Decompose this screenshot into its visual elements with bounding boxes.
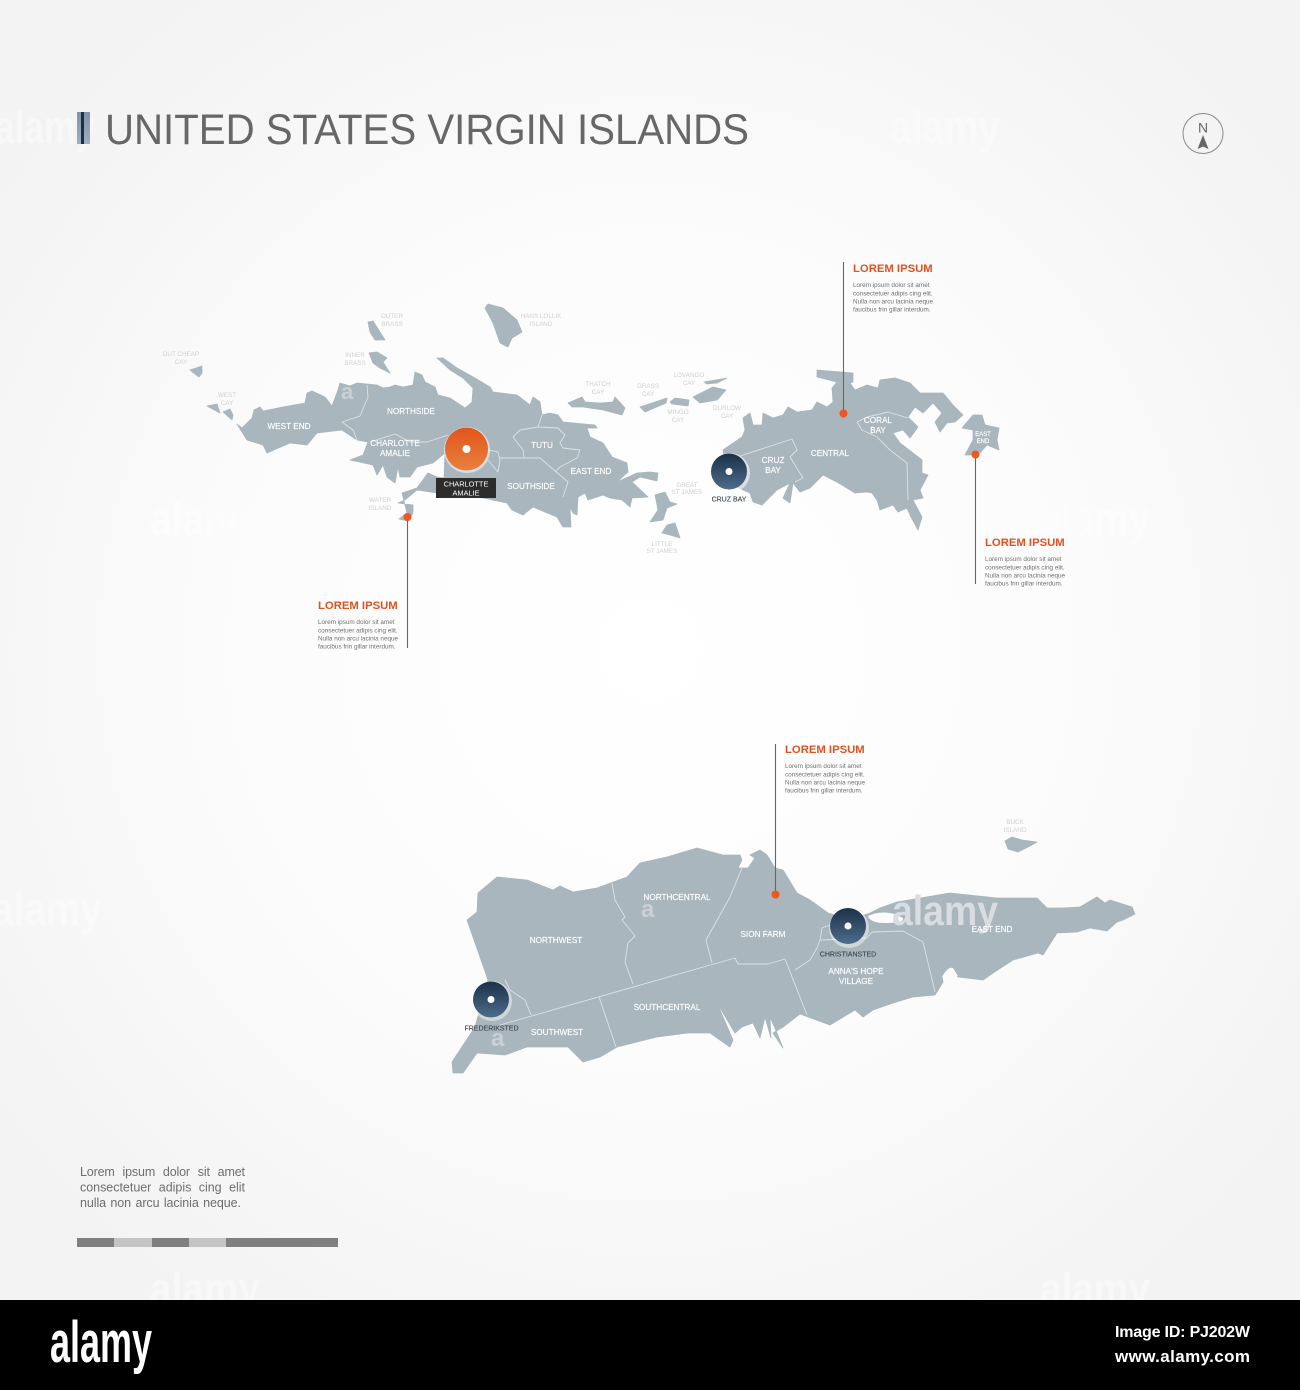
islet labels: HANS LOLLIK bbox=[521, 313, 562, 320]
islet labels: GRASS bbox=[637, 383, 659, 390]
islet labels: MINGO bbox=[667, 409, 689, 416]
pin: Christiansted: CHRISTIANSTED bbox=[820, 952, 876, 958]
callout: St John north bbox=[840, 262, 934, 418]
region labels: St John: CRUZ bbox=[762, 456, 784, 465]
islet labels: DURLOW bbox=[713, 405, 741, 412]
watermark on map bbox=[341, 379, 999, 1052]
islet: Thatch Cay bbox=[568, 397, 625, 415]
region labels: St John: BAY bbox=[765, 466, 781, 475]
text block: bottom note: consectetuer adipis cing elit bbox=[80, 1180, 246, 1194]
region labels: St Croix bbox=[530, 893, 1012, 1037]
pin: Charlotte Amalie bbox=[444, 427, 490, 473]
islet: Hans Lollik bbox=[485, 304, 522, 347]
icon: north compass bbox=[1183, 114, 1223, 154]
callout: St John north: LOREM IPSUM bbox=[853, 263, 933, 275]
callout: St John north: faucibus frin gillar interdum. bbox=[853, 306, 931, 314]
islet: Lovango Cay bbox=[693, 387, 726, 403]
pin: Frederiksted: FREDERIKSTED bbox=[464, 1026, 519, 1032]
islet labels: CAY bbox=[221, 400, 234, 407]
islet: Great St James bbox=[650, 492, 677, 522]
islet: East End bbox=[962, 415, 999, 455]
title text: UNITED STATES VIRGIN ISLANDS bbox=[105, 106, 749, 154]
islet labels: OUTER bbox=[381, 313, 403, 320]
watermarks: alamy bbox=[150, 1263, 260, 1315]
islet labels: LITTLE bbox=[652, 541, 672, 548]
region labels: St Croix: VILLAGE bbox=[839, 977, 874, 986]
callout: St Croix north: Lorem ipsum dolor sit amet bbox=[785, 763, 862, 770]
islet labels: GREAT bbox=[676, 482, 698, 489]
islet: Inner Brass bbox=[369, 352, 390, 373]
callout: St John north: Nulla non arcu lacinia neque bbox=[853, 298, 934, 306]
label: Charlotte Amalie bbox=[436, 478, 496, 498]
text block: bottom note: Lorem ipsum dolor sit amet bbox=[80, 1165, 246, 1179]
icon: north compass: N bbox=[1198, 120, 1208, 136]
callout: St John east bbox=[972, 450, 1066, 588]
region labels: St Croix: SOUTHWEST bbox=[531, 1028, 583, 1037]
region labels: St Croix: EAST END bbox=[972, 925, 1012, 934]
region labels: St Thomas bbox=[267, 407, 611, 491]
watermarks: alamy bbox=[150, 493, 260, 545]
region labels: St Thomas: TUTU bbox=[531, 441, 553, 450]
text block: bottom note: nulla non arcu lacinia neque. bbox=[80, 1196, 241, 1210]
title marker icon bbox=[77, 112, 90, 144]
footer image id: Image ID: PJ202W bbox=[1115, 1324, 1251, 1341]
islet labels: LOVANGO bbox=[674, 372, 704, 379]
islet labels: WEST bbox=[218, 392, 236, 399]
region labels: St John: EAST bbox=[975, 432, 991, 438]
callout: St John east: LOREM IPSUM bbox=[985, 537, 1065, 549]
map: St John bbox=[723, 370, 999, 530]
region labels: St Thomas: CHARLOTTE bbox=[370, 439, 420, 448]
callout: St Thomas south: Nulla non arcu lacinia neque bbox=[318, 636, 399, 642]
region labels: St Croix: NORTHCENTRAL bbox=[643, 893, 711, 902]
text block: bottom note bbox=[80, 1165, 246, 1210]
islet labels: THATCH bbox=[585, 381, 611, 388]
watermarks bbox=[0, 101, 1150, 1315]
main island bbox=[723, 370, 963, 530]
district borders bbox=[342, 385, 368, 440]
footer logo: alamy bbox=[50, 1310, 152, 1375]
watermarks: alamy bbox=[1040, 493, 1150, 545]
watermarks: alamy bbox=[890, 101, 1000, 153]
main island bbox=[237, 358, 658, 527]
scale bar bbox=[77, 1238, 338, 1247]
district borders bbox=[740, 439, 803, 482]
region labels: St Croix: ANNA'S HOPE bbox=[828, 967, 884, 976]
islet labels: ST JAMES bbox=[672, 489, 702, 496]
region labels: St John: END bbox=[977, 439, 990, 445]
callout: St John north: consectetuer adipis cing elit. bbox=[853, 290, 933, 298]
watermark on map: a bbox=[641, 896, 655, 923]
region labels: St John: BAY bbox=[870, 426, 886, 435]
islet: West Cay bbox=[207, 404, 220, 413]
inlet east bbox=[942, 968, 958, 977]
callout: St Croix north: LOREM IPSUM bbox=[785, 744, 865, 756]
region labels: St Thomas: NORTHSIDE bbox=[387, 407, 436, 416]
callout: St John north: Lorem ipsum dolor sit amet bbox=[853, 282, 930, 289]
inlet bbox=[868, 912, 903, 923]
islet labels: BRASS bbox=[381, 321, 403, 328]
islet: Grass Cay bbox=[640, 398, 667, 412]
watermarks: alamy bbox=[1040, 1263, 1150, 1315]
region labels: St Croix: SOUTHCENTRAL bbox=[634, 1003, 701, 1012]
pin: Frederiksted bbox=[464, 981, 519, 1032]
islet labels: BRASS bbox=[344, 360, 366, 367]
islet labels: INNER bbox=[345, 352, 365, 359]
callout: St Croix north: consectetuer adipis cing elit. bbox=[785, 772, 865, 778]
watermark on map: alamy bbox=[892, 887, 999, 934]
region labels: St Thomas: SOUTHSIDE bbox=[507, 482, 555, 491]
islet labels: CAY bbox=[175, 359, 188, 366]
main island bbox=[452, 848, 1135, 1073]
footer bar bbox=[0, 1300, 1300, 1390]
label: Charlotte Amalie: AMALIE bbox=[452, 488, 480, 498]
callout: St Thomas south bbox=[318, 513, 412, 650]
callout: St Croix north: Nulla non arcu lacinia neque bbox=[785, 780, 866, 786]
region labels: St John: CORAL bbox=[864, 416, 893, 425]
callout: St Thomas south: Lorem ipsum dolor sit amet bbox=[318, 619, 395, 626]
islet labels: CAY bbox=[683, 380, 696, 387]
islet labels bbox=[163, 313, 1027, 834]
region labels: St Thomas: EAST END bbox=[571, 467, 611, 476]
callout: St Thomas south: consectetuer adipis cing elit. bbox=[318, 628, 398, 634]
islet labels: ISLAND bbox=[530, 321, 553, 328]
islet labels: ISLAND bbox=[1004, 827, 1027, 834]
islet labels: CAY bbox=[592, 389, 605, 396]
islet labels: WATER bbox=[369, 497, 391, 504]
footer site: www.alamy.com bbox=[1114, 1347, 1250, 1366]
watermark on map: a bbox=[341, 379, 354, 404]
callout: St John east: faucibus frin gillar interdum. bbox=[985, 580, 1063, 588]
pin: Cruz Bay: CRUZ BAY bbox=[712, 496, 747, 504]
islet labels: DUT CHEAP bbox=[163, 351, 199, 358]
region labels: St Thomas: WEST END bbox=[267, 422, 311, 431]
islet: Outer Brass bbox=[368, 321, 385, 340]
islet labels: ISLAND bbox=[369, 505, 392, 512]
islet: Little St James bbox=[662, 523, 680, 538]
callout: St Croix north bbox=[772, 744, 866, 898]
label: Charlotte Amalie: CHARLOTTE bbox=[444, 480, 488, 488]
callout: St John east: Nulla non arcu lacinia neque bbox=[985, 572, 1066, 580]
district borders bbox=[612, 883, 635, 984]
watermark on map: a bbox=[491, 1025, 505, 1052]
callout: St Thomas south: faucibus frin gillar interdum. bbox=[318, 644, 396, 650]
region labels: St Thomas: AMALIE bbox=[380, 449, 411, 458]
islet: Mingo Cay bbox=[670, 398, 689, 406]
pin: Cruz Bay bbox=[710, 453, 750, 504]
region labels: St Croix: SION FARM bbox=[740, 930, 786, 939]
islet: West Cay 2 bbox=[223, 409, 233, 420]
region labels: St John bbox=[762, 416, 991, 475]
islet: Congo bbox=[704, 378, 727, 384]
callout: St Croix north: faucibus frin gillar interdum. bbox=[785, 788, 863, 794]
title bbox=[77, 106, 749, 154]
islet: Buck Island bbox=[1005, 837, 1037, 852]
map: St Thomas bbox=[190, 304, 727, 538]
map: St Croix bbox=[452, 837, 1135, 1073]
islet labels: CAY bbox=[721, 413, 734, 420]
pin: Christiansted bbox=[820, 908, 876, 958]
region labels: St Croix: NORTHWEST bbox=[530, 936, 582, 945]
islet labels: CAY bbox=[642, 391, 655, 398]
islet labels: ST JAMES bbox=[647, 548, 677, 555]
islet labels: BUCK bbox=[1006, 819, 1025, 826]
region labels: St John: CENTRAL bbox=[811, 449, 850, 458]
islet labels: CAY bbox=[672, 417, 685, 424]
callout: St Thomas south: LOREM IPSUM bbox=[318, 600, 398, 612]
callout: St John east: Lorem ipsum dolor sit amet bbox=[985, 556, 1062, 563]
callout: St John east: consectetuer adipis cing elit. bbox=[985, 564, 1065, 572]
islet: Dutchcap Cay bbox=[190, 366, 202, 377]
